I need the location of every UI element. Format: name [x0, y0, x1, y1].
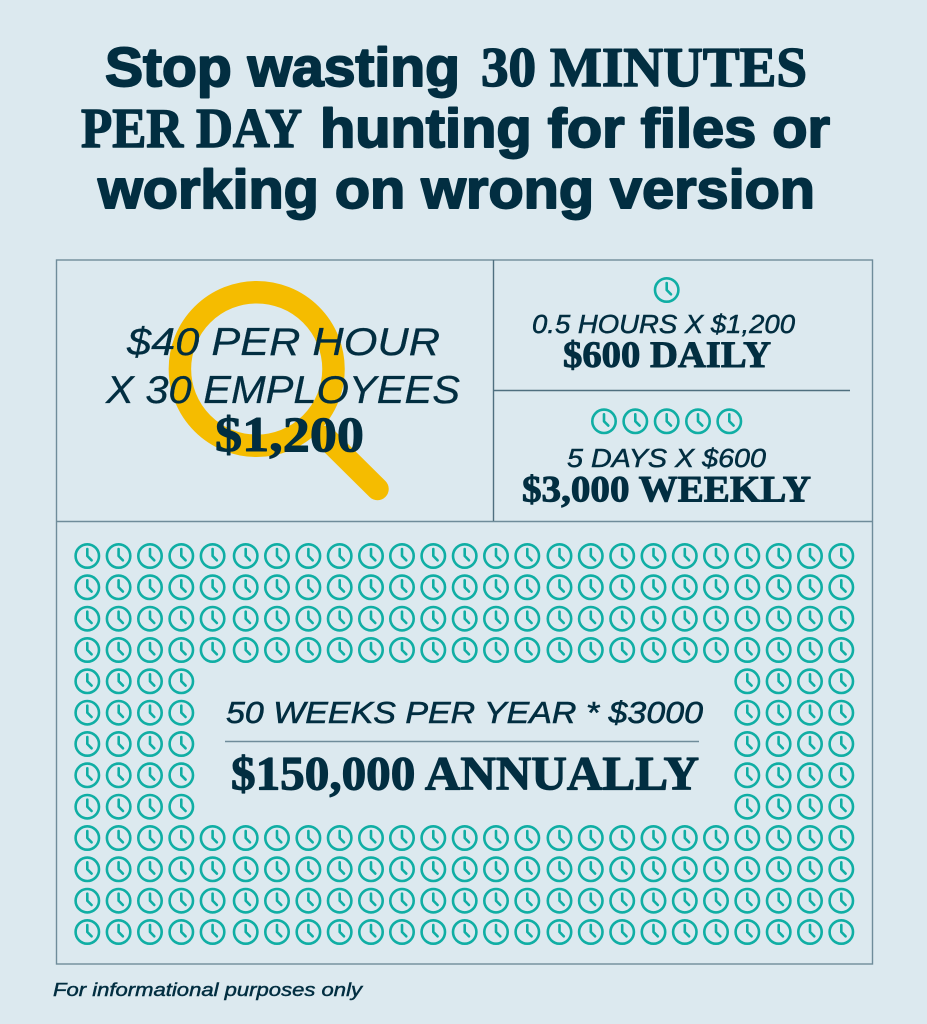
title: 30 MINUTES — [481, 37, 807, 99]
title: Stop wasting — [105, 36, 460, 98]
annual calculation: 50 WEEKS PER YEAR * $3000 — [226, 695, 703, 730]
title: working on wrong version — [97, 158, 815, 220]
panel frame — [56, 260, 872, 964]
icon: five clocks — [592, 410, 741, 433]
hourly total: $1,200 — [215, 406, 364, 462]
panel: weekly cost — [522, 410, 811, 510]
weekly calculation: 5 DAYS X $600 — [567, 443, 767, 473]
title: hunting for files or — [320, 97, 830, 159]
footnote: For informational purposes only — [53, 980, 363, 1000]
weekly total: $3,000 WEEKLY — [522, 470, 811, 510]
annual total: $150,000 ANNUALLY — [231, 748, 699, 800]
employees text: X 30 EMPLOYEES — [105, 369, 460, 412]
icon: clock — [655, 278, 678, 302]
panel: hourly cost — [105, 292, 460, 489]
panel: daily cost — [532, 278, 796, 376]
daily total: $600 DAILY — [563, 335, 771, 376]
hourly rate text: $40 PER HOUR — [126, 321, 440, 364]
panel: annual clock grid — [76, 544, 853, 944]
title — [81, 36, 830, 220]
title: PER DAY — [81, 98, 302, 160]
daily calculation: 0.5 HOURS X $1,200 — [532, 309, 796, 339]
icon: magnifying glass — [180, 292, 378, 489]
